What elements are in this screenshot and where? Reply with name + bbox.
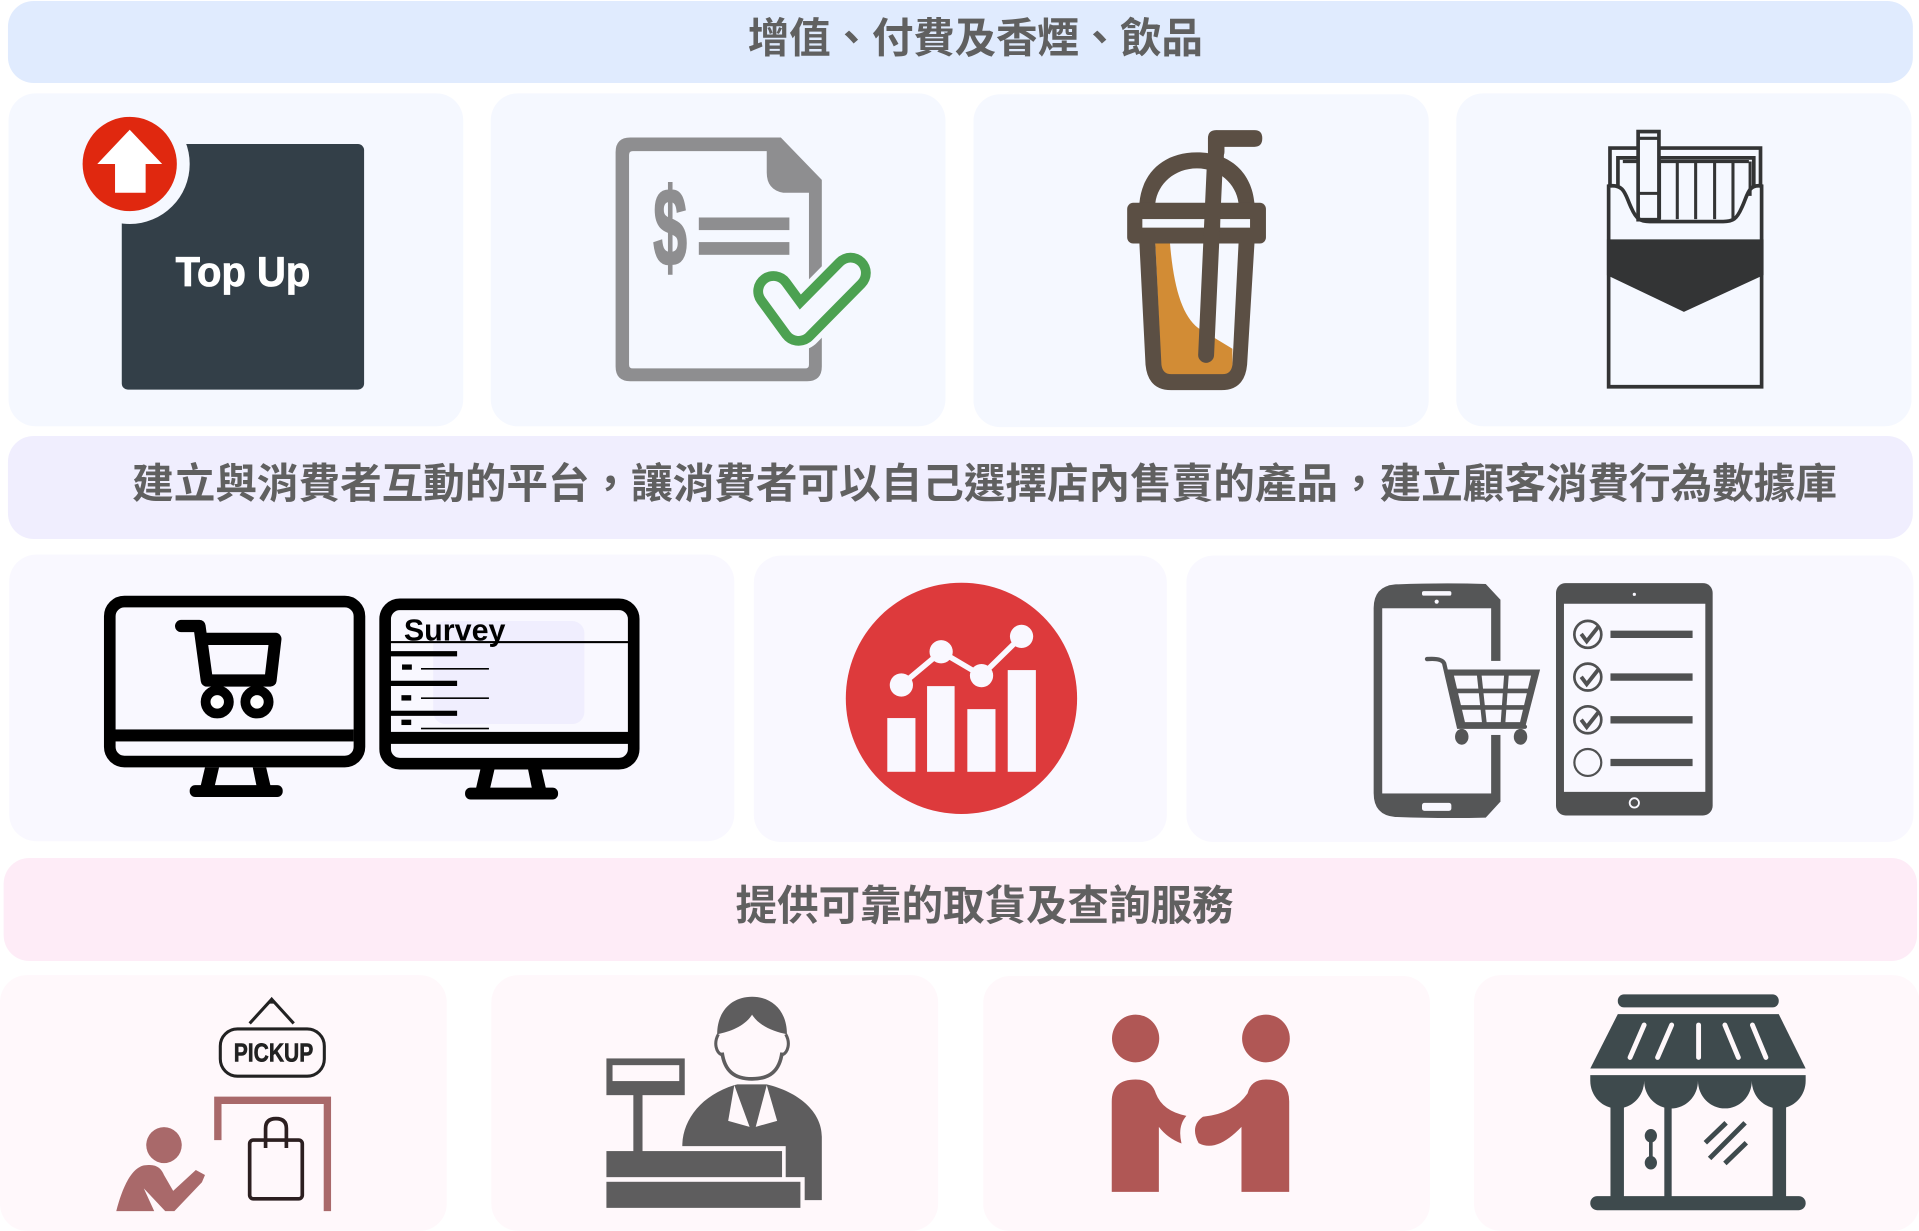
icon: bill with check mark — [616, 137, 851, 381]
panel: store — [1474, 975, 1919, 1231]
icon: phone with cart — [1374, 583, 1540, 818]
icon: monitor with survey: Survey — [404, 614, 505, 648]
section 2: interactive platform — [8, 436, 1913, 842]
panel: customer service — [983, 976, 1430, 1231]
heading band 2: 建立與消費者互動的平台，讓消費者可以自己選擇店內售賣的產品，建立顧客消費行為數據庫 — [132, 460, 1837, 507]
icon: monitor with shopping cart — [110, 602, 359, 797]
panel: online shopping and survey — [9, 555, 734, 841]
panel: mobile shopping and checklist — [1186, 556, 1913, 842]
section 1: top-up, bill payment, cigarettes and drinks — [8, 1, 1913, 427]
panel: pickup — [0, 975, 447, 1231]
icon: monitor with survey — [381, 604, 634, 799]
section 3: pickup and enquiry services — [0, 858, 1919, 1231]
icon: shop front — [1590, 994, 1806, 1210]
icon: bill with check mark: $ — [653, 166, 687, 289]
icon: handshake — [1112, 1015, 1290, 1192]
icon: cigarette pack — [1607, 132, 1764, 387]
icon: analytics chart — [846, 583, 1077, 814]
icon: takeaway drink — [1127, 130, 1266, 390]
heading band 1 — [8, 1, 1913, 83]
heading band 2 — [8, 436, 1913, 539]
icon: pickup counter — [116, 997, 327, 1211]
panel: drinks — [973, 94, 1429, 427]
panel: bill payment — [491, 93, 945, 426]
icon: pickup counter: PICKUP — [234, 1040, 313, 1068]
panel: cashier — [491, 975, 938, 1231]
panel: top up — [9, 93, 463, 426]
heading band 3 — [4, 858, 1917, 961]
icon: shopping cart — [1427, 659, 1540, 745]
icon: tablet checklist — [1556, 583, 1713, 815]
icon: top up card: Top Up — [176, 248, 310, 295]
heading band 3: 提供可靠的取貨及查詢服務 — [736, 882, 1234, 929]
heading band 1: 增值、付費及香煙、飲品 — [748, 15, 1203, 62]
icon: top up card — [70, 104, 364, 390]
panel: cigarettes — [1456, 93, 1912, 426]
icon: cashier at register — [606, 997, 822, 1208]
panel: data analytics — [754, 556, 1167, 842]
